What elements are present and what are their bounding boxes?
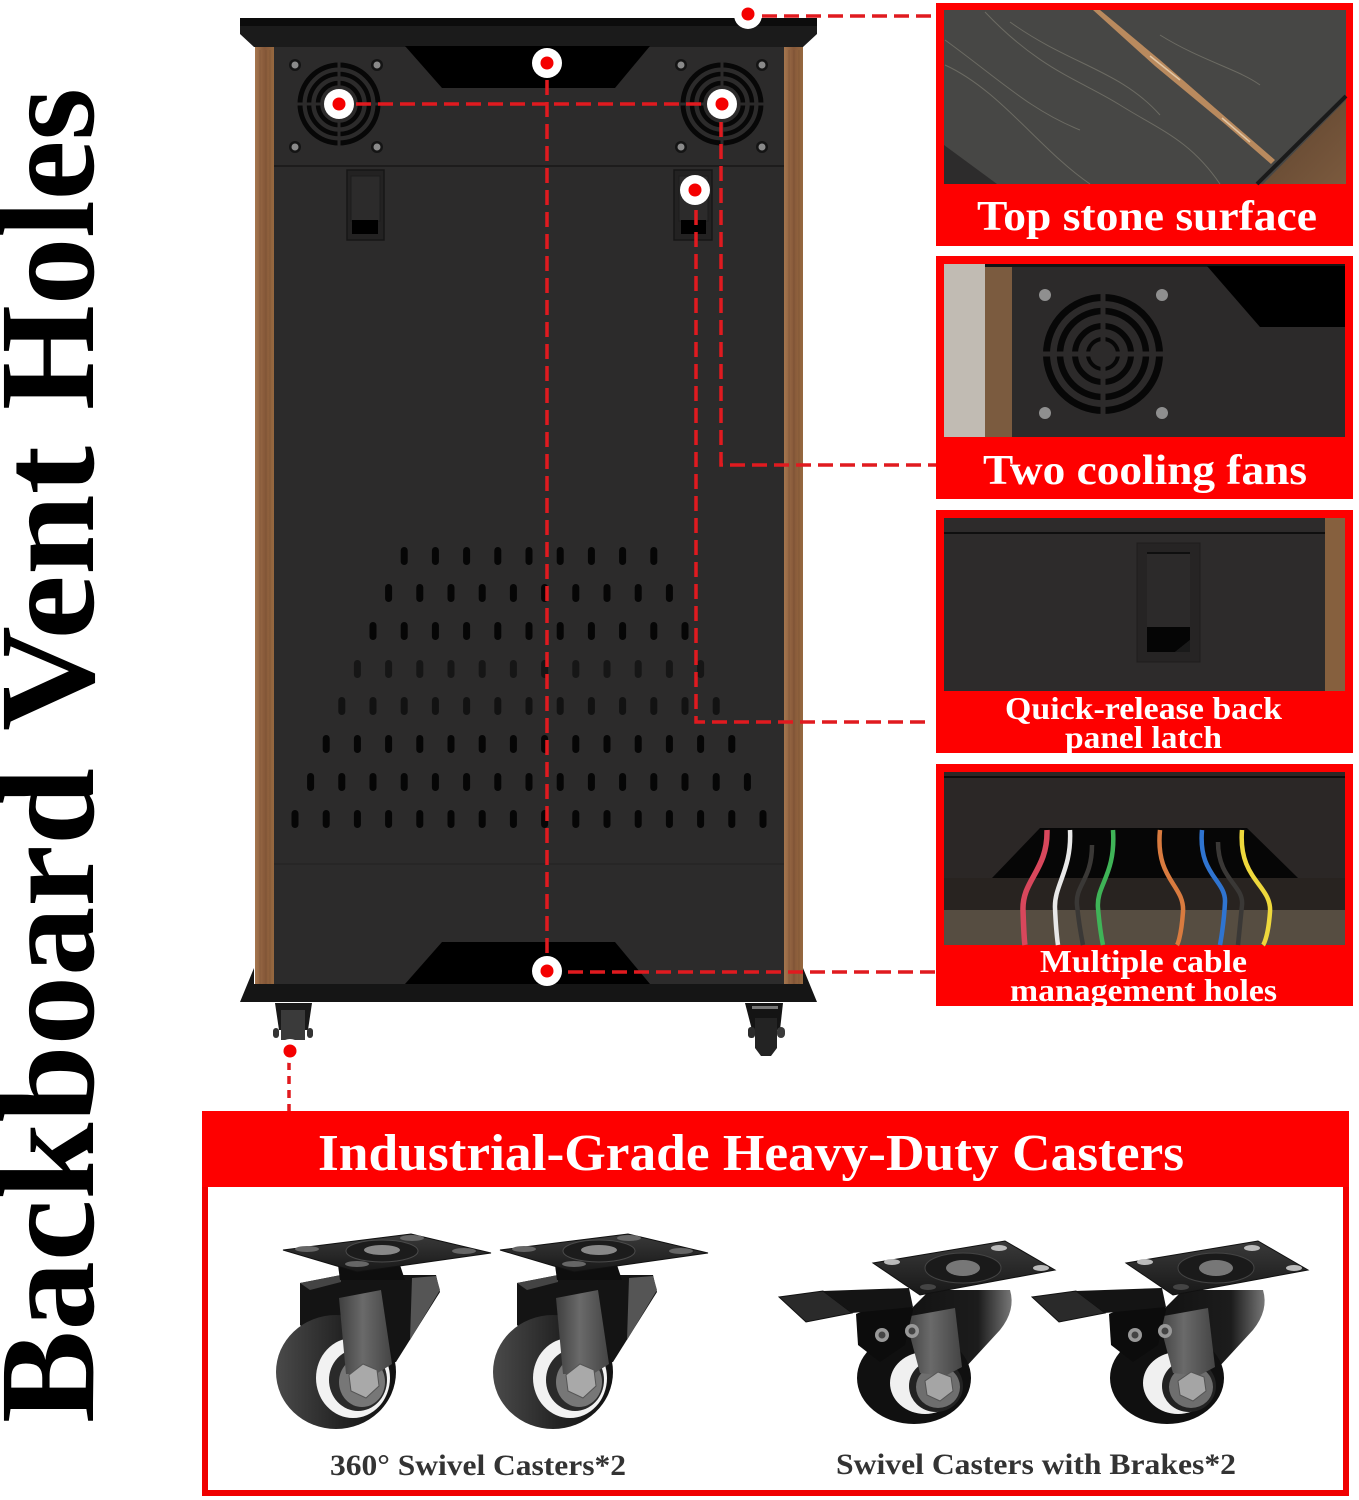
- leader line: lower cable hole: [568, 970, 936, 974]
- panel: cable management: [936, 764, 1353, 1008]
- leader line: top stone surface: [762, 14, 936, 18]
- leader line: cable holes vertical: [545, 80, 549, 958]
- cabinet back view: [240, 18, 817, 1056]
- caption: swivel: 360° Swivel Casters*2: [330, 1449, 626, 1482]
- right panel latch: [674, 170, 712, 240]
- header band: [202, 1111, 1349, 1187]
- label: Quick-release back: [1005, 690, 1282, 726]
- photo: cables through hole: [944, 772, 1345, 945]
- title: Backboard Vent Holes: [0, 88, 123, 1423]
- caption: brakes: Swivel Casters with Brakes*2: [836, 1448, 1236, 1481]
- icon: brake caster 1: [779, 1241, 1055, 1424]
- left panel latch: [347, 170, 384, 240]
- label: panel latch: [1065, 719, 1222, 755]
- marker: left fan: [324, 89, 354, 119]
- left wheel: [273, 1003, 313, 1040]
- base plate: [240, 968, 817, 1002]
- left cooling fan: [289, 59, 383, 153]
- marker: right fan: [707, 89, 737, 119]
- marker: latch: [680, 175, 710, 205]
- marker: top surface: [734, 1, 762, 29]
- leader line: between fans: [356, 102, 708, 106]
- lower cable opening: [405, 942, 650, 984]
- panel seams: [274, 165, 784, 167]
- back panel: [274, 45, 784, 985]
- marker: lower cable hole: [532, 956, 562, 986]
- top stone slab: [240, 18, 817, 47]
- upper cable opening: [405, 46, 650, 88]
- wood side posts: [255, 45, 803, 985]
- label: management holes: [1010, 972, 1277, 1008]
- icon: swivel caster 1: [276, 1234, 491, 1429]
- label: Top stone surface: [977, 194, 1317, 240]
- right wheel: [745, 1003, 785, 1056]
- panel: quick-release latch: [936, 510, 1353, 755]
- icon: swivel caster 2: [493, 1234, 708, 1429]
- photo: stone top: [944, 10, 1346, 184]
- leader line: caster: [287, 1062, 291, 1112]
- photo: fan close-up: [944, 264, 1345, 437]
- panel: top stone surface: [936, 3, 1353, 246]
- leader line: cooling fans: [721, 122, 936, 465]
- label: [1005, 690, 1282, 755]
- label: [1010, 943, 1277, 1008]
- icon: brake caster 2: [1032, 1241, 1308, 1424]
- label: Multiple cable: [1040, 943, 1247, 979]
- photo: latch close-up: [944, 518, 1345, 691]
- leader line: latch: [696, 210, 932, 722]
- panel: two cooling fans: [936, 256, 1353, 499]
- marker: caster: [278, 1039, 302, 1063]
- marker: upper cable hole: [532, 48, 562, 78]
- heading: Industrial-Grade Heavy-Duty Casters: [318, 1125, 1184, 1182]
- vent holes: [295, 550, 763, 824]
- panel: casters: [202, 1111, 1349, 1493]
- label: Two cooling fans: [983, 448, 1307, 494]
- right cooling fan: [675, 59, 768, 153]
